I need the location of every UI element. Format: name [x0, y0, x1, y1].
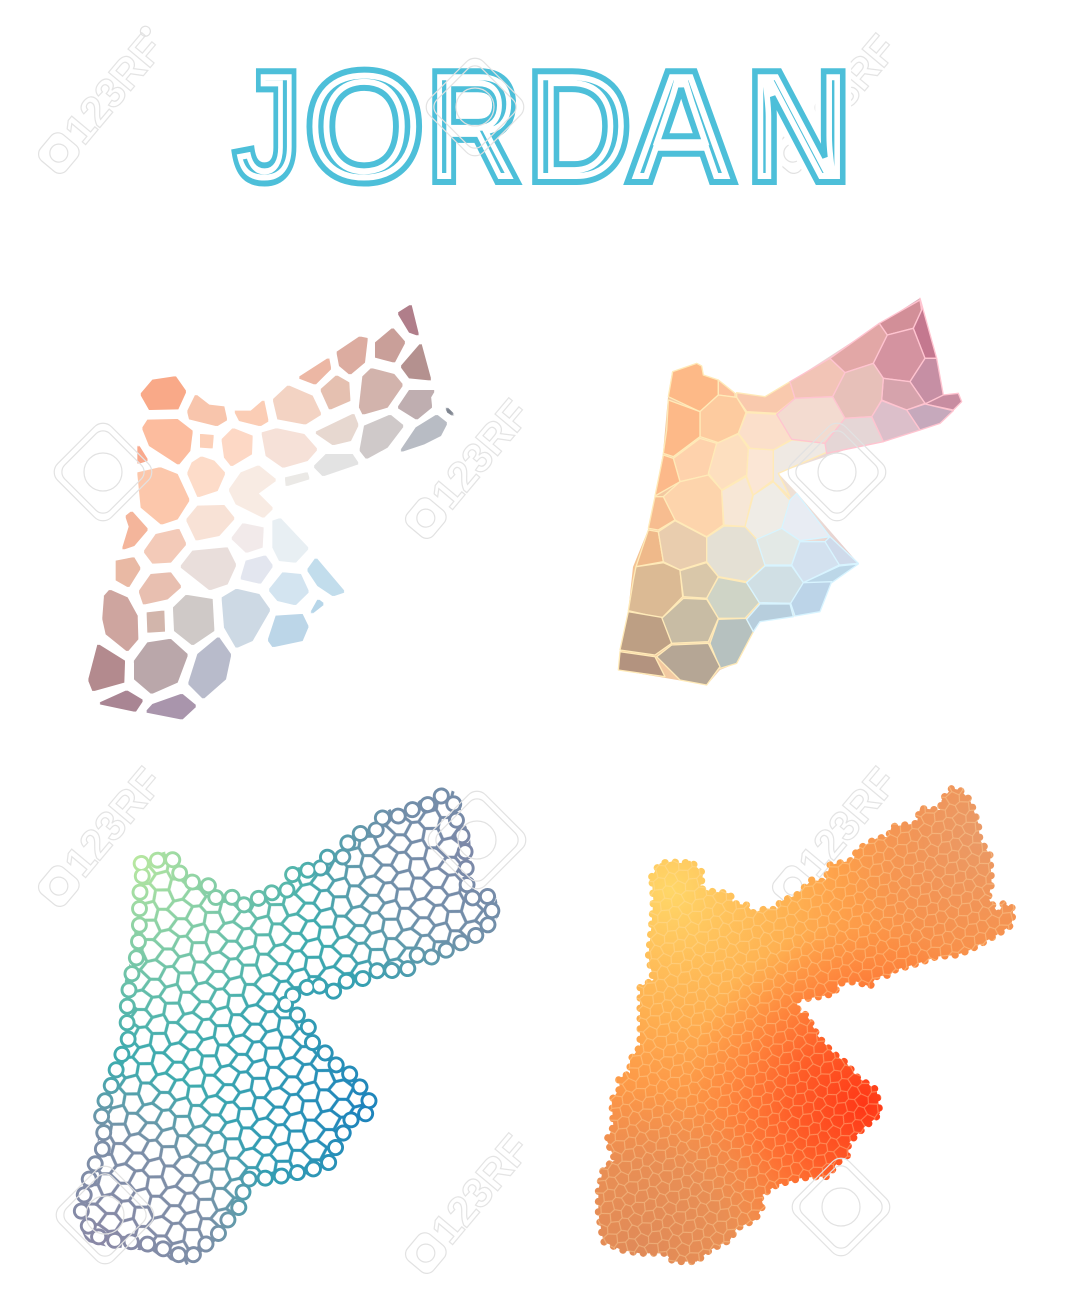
watermark camera: left: [49, 418, 157, 526]
watermark: centre upper: 123RF: [422, 391, 539, 517]
title: R: [426, 36, 521, 216]
title: O: [303, 36, 426, 216]
title: O: [303, 36, 426, 216]
title: J: [232, 36, 303, 216]
watermark: centre upper: [397, 391, 539, 547]
watermark: middle right: [764, 759, 906, 915]
watermark: bottom centre: 123RF: [422, 1126, 539, 1252]
watermark: top right: 123RF: [789, 26, 906, 152]
watermark camera: title: [421, 53, 529, 161]
map: orange filled mosaic: [594, 785, 1016, 1266]
title: N: [745, 36, 853, 216]
title: D: [525, 36, 633, 216]
map: teal line mosaic: [72, 788, 500, 1265]
watermark camera: centre: [423, 786, 531, 894]
watermark: middle right: 123RF: [789, 759, 906, 885]
title: O: [303, 36, 426, 216]
watermark: top left: [30, 20, 176, 182]
watermark: middle left: 123RF: [55, 759, 172, 885]
title: J: [232, 36, 303, 216]
title: A: [623, 36, 739, 216]
watermark camera: right: [783, 418, 891, 526]
watermark: bottom centre: [397, 1126, 539, 1282]
watermark: tile grid: [30, 20, 906, 1282]
title: J: [232, 36, 303, 216]
watermark: camera outlines: [49, 53, 895, 1269]
watermark: top right: [764, 26, 906, 182]
title: R: [426, 36, 521, 216]
title: [232, 36, 853, 216]
title: N: [745, 36, 853, 216]
title: A: [623, 36, 739, 216]
watermark: middle left: [30, 759, 172, 915]
watermark camera: bottom right: [787, 1153, 895, 1261]
title: D: [525, 36, 633, 216]
title: A: [623, 36, 739, 216]
map: joined pastel cells: [618, 298, 962, 685]
map: separated pastel cells: [89, 306, 453, 718]
watermark: top left: 123RF: [55, 26, 172, 152]
title: D: [525, 36, 633, 216]
watermark camera: bottom left: [51, 1161, 159, 1269]
title: N: [745, 36, 853, 216]
title: R: [426, 36, 521, 216]
